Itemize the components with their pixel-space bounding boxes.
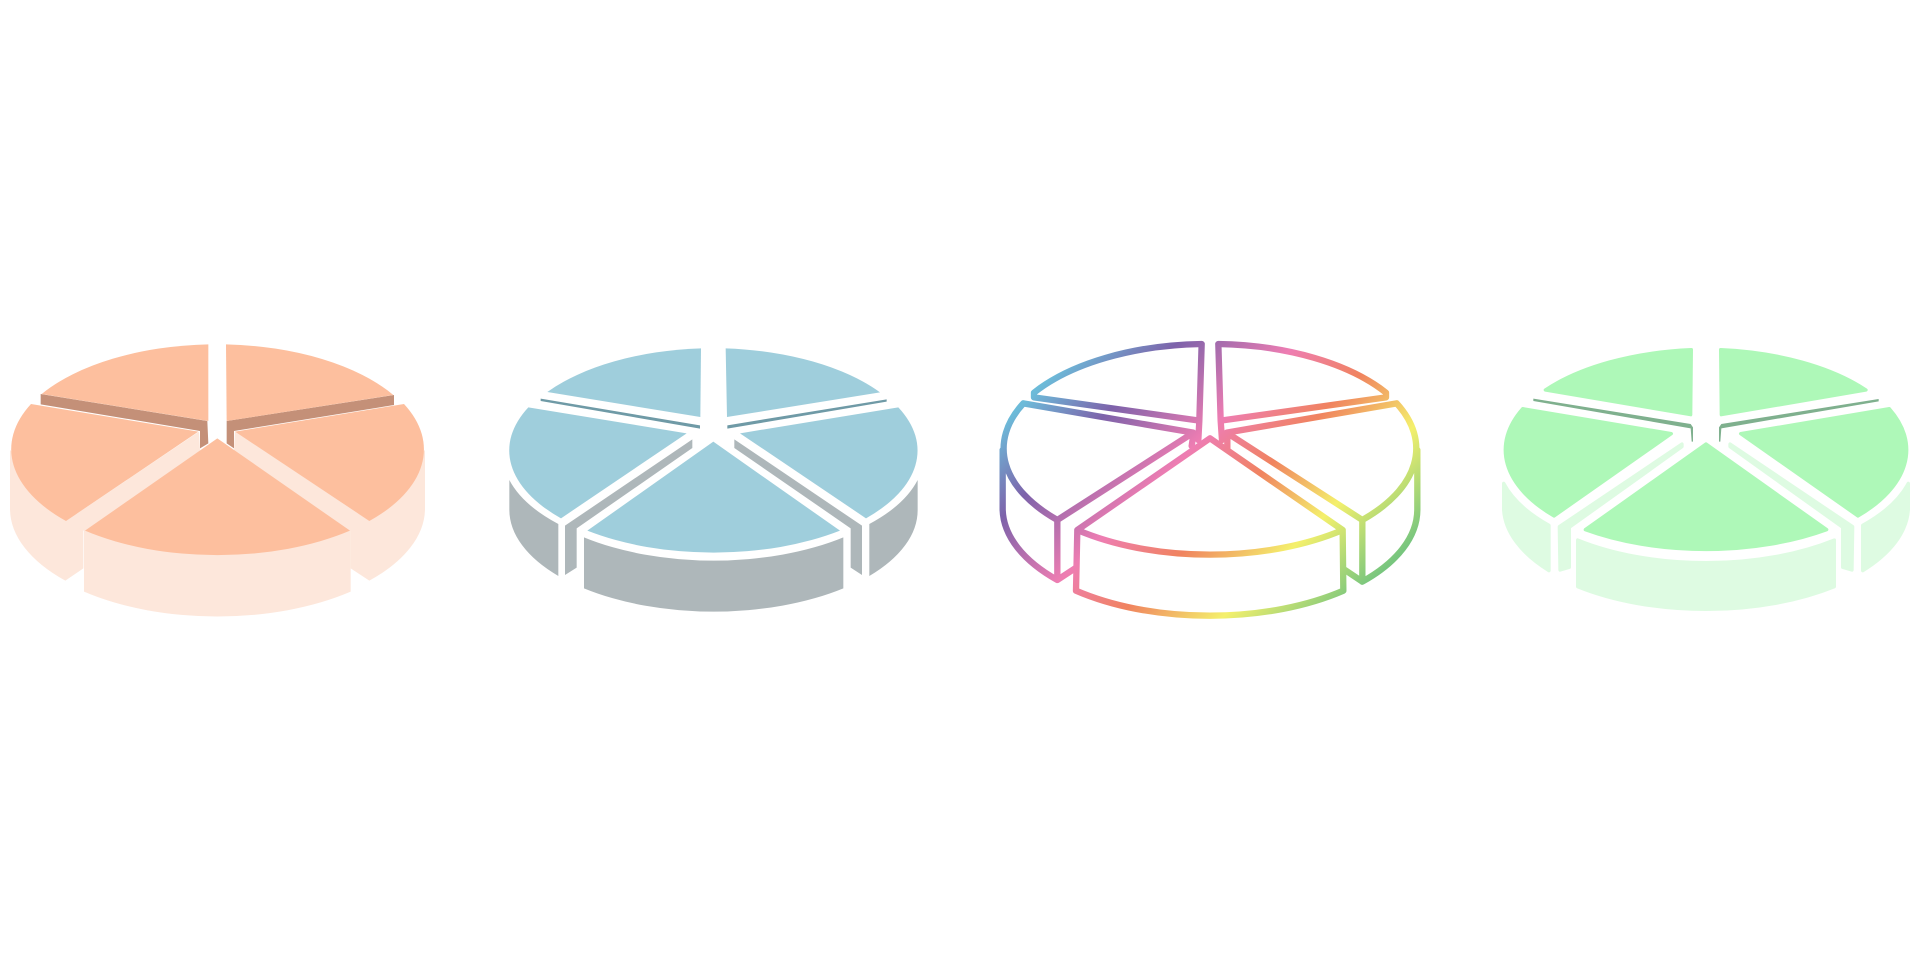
orange dark inner walls xyxy=(41,394,394,448)
outline: front slice with wall xyxy=(1076,438,1343,616)
outline: right slice with wall xyxy=(1227,403,1417,582)
pale green side walls xyxy=(1504,444,1908,609)
outline: top-right slice xyxy=(1218,344,1386,440)
chart: rainbow gradient outline pie xyxy=(1003,344,1417,616)
chart: orange flat pie xyxy=(10,344,425,616)
orange top slices xyxy=(11,344,424,555)
chart: green rounded pie xyxy=(1504,350,1908,609)
green top slices xyxy=(1505,350,1907,549)
orange pale side walls xyxy=(10,432,425,616)
dark teal inner lines xyxy=(541,399,887,429)
grey side walls xyxy=(509,439,918,612)
dark green inner lines xyxy=(1533,399,1879,442)
outline: left slice with wall xyxy=(1003,403,1193,580)
chart: blue and grey pie xyxy=(509,348,918,612)
blue top slices xyxy=(509,348,918,553)
outline: top-left slice xyxy=(1034,344,1202,440)
